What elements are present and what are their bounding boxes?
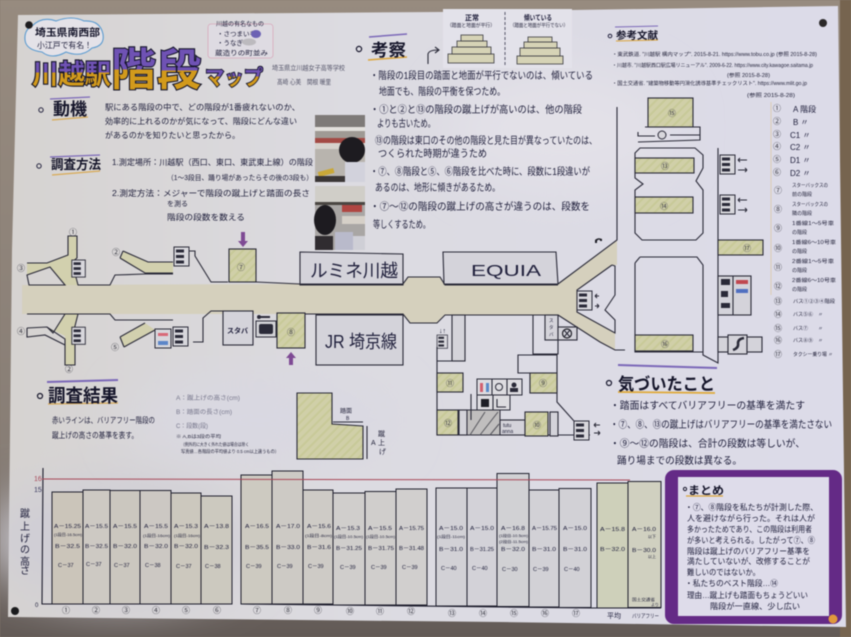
chart key: A：蹴上げの高さ(cm) — [176, 394, 240, 402]
legend of stairs: ⑦ — [774, 186, 782, 195]
bar values: C－30 — [502, 567, 518, 573]
tilt comparison diagram: 正常 — [465, 13, 479, 22]
main title: マップ — [205, 67, 263, 90]
bar values: 以上 — [648, 553, 656, 559]
bar values: C－39 — [246, 564, 262, 570]
panel: summary: ・⑦、⑧階段を私たちが計測した際、 — [685, 502, 818, 512]
bar values: B－30.0 — [632, 548, 656, 554]
bar values: B－32.5 — [55, 544, 80, 550]
stair 13 — [635, 158, 694, 173]
section: method: 2.測定方法：メジャーで階段の蹴上げと踏面の長さ — [112, 188, 310, 198]
bar values: 以下 — [648, 534, 656, 539]
section: discussion: ⑬の階段は東口のその他の階段と見た目が異なっていたのは、 — [375, 134, 597, 147]
main title: 川越駅 — [32, 60, 111, 90]
legend of stairs: 2番線1〜5号車 — [792, 258, 834, 265]
stair 16 — [635, 335, 693, 351]
legend of stairs: バス⑦ 〃 — [793, 325, 823, 332]
note: famous things in Kawagoe: 川越の有名なもの — [216, 20, 264, 28]
authors: 埼玉県立川越女子高等学校 — [272, 63, 345, 72]
y axis title: 高 — [20, 555, 30, 568]
bar values: A－15.5 — [85, 524, 108, 530]
west side stairs upper right: ② — [112, 248, 120, 257]
bar values: A－15.0 — [439, 526, 463, 532]
cloud callout: Saitama — [25, 18, 103, 56]
bar values: A－15.5 — [113, 524, 137, 530]
Lumine Kawagoe: ルミネ川越 — [310, 261, 398, 281]
bar values: (1段目-16cm) — [174, 532, 201, 538]
legend of stairs: タクシー乗り場 〃 — [793, 351, 833, 358]
x axis labels: ⑮ — [510, 609, 518, 618]
bar values: C－37 — [176, 564, 192, 570]
west side stairs upper left: ③ — [17, 264, 25, 273]
legend of stairs: C2 〃 — [790, 143, 810, 152]
bar values: C－40 — [441, 566, 457, 572]
section: noticed: ・⑨〜⑫の階段は、合計の段数は等しいが、 — [610, 437, 805, 450]
stair 9: ⑨ — [539, 379, 547, 388]
taxi stand — [718, 335, 762, 354]
stair 12 and shops: anna — [502, 429, 513, 435]
west side stairs lower: ④ — [17, 327, 25, 336]
x axis labels: ⑬ — [448, 609, 456, 618]
section: method: を測る — [167, 199, 188, 208]
bar values: C－39 — [308, 564, 324, 570]
section: references: ・東武鉄道. "川越駅 構内マップ". 2015-8-21. https://www.tobu.co.jp (参照 2015-8-28) — [612, 51, 817, 58]
y axis title: さ — [20, 565, 30, 577]
section: results heading: 調査結果 — [48, 386, 118, 406]
panel: summary: が多いと考えられる。したがって⑦、⑧ — [687, 535, 815, 545]
panel: summary: 難しいのではないか。 — [687, 567, 760, 577]
section: discussion: ・⑦〜⑫の階段の蹴上げの高さが違うのは、段数を — [370, 200, 590, 213]
note: famous things in Kawagoe: 蔵造りの町並み — [215, 48, 269, 57]
bar values: A－15.3 — [174, 524, 198, 530]
bar values: C－39 — [533, 567, 549, 573]
y axis title: の — [20, 545, 30, 556]
legend of stairs: ⑫ — [774, 282, 782, 291]
red barrier free standard line — [42, 479, 630, 480]
bar values: C－38 — [145, 563, 161, 569]
stair dimension diagram: げ — [379, 447, 386, 456]
section: discussion: あるのは、地形に傾きがあるため。 — [375, 181, 500, 194]
section: noticed: ・踏面はすべてバリアフリーの基準を満たす — [610, 399, 805, 412]
bar values: B－32.0 — [113, 544, 137, 550]
bar values: (1段目-10.5cm) — [334, 533, 364, 539]
chart key: C：段数(段) — [176, 422, 208, 430]
bar values: より — [651, 601, 659, 607]
legend of stairs: スターバックスの — [792, 182, 828, 189]
section: discussion: 考察 — [371, 41, 406, 60]
panel: summary: まとめ — [688, 484, 724, 497]
section: method: 階段の段数を数える — [167, 212, 245, 222]
stair 12 and shops: ⑫ — [444, 419, 452, 428]
section: method — [37, 155, 313, 222]
axis values: 15 — [34, 487, 42, 494]
main title: 段 — [157, 46, 201, 95]
y axis title: 蹴 — [20, 507, 30, 520]
legend of stairs: ② — [773, 117, 781, 126]
legend of stairs: バス①②③④階段 — [793, 298, 835, 305]
arrow to text — [428, 47, 439, 64]
bar values: (1段目-16cm) — [143, 532, 171, 538]
section: discussion: よりも古いため。 — [377, 117, 435, 130]
corridor — [22, 240, 617, 350]
stair 8 with purple arrow — [277, 313, 305, 365]
section: references — [608, 26, 817, 99]
legend of stairs: ⑨ — [774, 224, 782, 233]
bar values: A－16.0 — [632, 527, 656, 533]
section: results heading — [38, 380, 155, 440]
lower stair 5, toilets and stairs: ⑤ — [111, 343, 119, 352]
stair 9 — [530, 373, 557, 393]
bar values — [54, 524, 659, 607]
section: references: ・国土交通省. "建築物移動等円滑化誘導基準チェックリスト". https://www.mlit.go.jp — [612, 80, 807, 87]
legend of stairs: C1 〃 — [790, 131, 810, 140]
legend of stairs: 前の階段 — [792, 191, 812, 198]
bar values: C－37 — [58, 563, 74, 569]
main title: 階 — [111, 44, 156, 95]
JR Saikyo line: JR 埼京線 — [325, 332, 397, 352]
stair 17 — [718, 240, 763, 255]
x axis labels: ⑤ — [182, 606, 190, 615]
bar values: (1段目-16.5cm) — [54, 531, 83, 537]
section: discussion: 等しくするため。 — [373, 218, 430, 231]
legend of stairs: ⑩ — [774, 244, 782, 253]
authors: 髙崎 心美 関根 暖里 — [277, 77, 331, 86]
EQUIA — [443, 252, 558, 284]
photos of measuring stairs — [314, 115, 365, 250]
chart key: 写真値…各階段の平均値より 0.5 cm以上違うもの） — [181, 448, 279, 455]
legend of stairs: D2 〃 — [790, 169, 810, 178]
stair 11: ⑪ — [446, 379, 454, 388]
bar values: C－39 — [340, 565, 356, 571]
bar values: B－32.0 — [174, 544, 198, 550]
photo 2 — [314, 186, 365, 250]
panel: summary: 階段は蹴上げのバリアフリー基準を — [687, 546, 810, 556]
legend of stairs: の階段 — [792, 286, 807, 293]
axis values: 0 — [35, 603, 39, 609]
note: famous things in Kawagoe: ・うなぎ — [217, 38, 244, 47]
bar values: B－31.75 — [368, 546, 394, 552]
bar values: A－15.0 — [470, 526, 494, 532]
tilt comparison diagram — [428, 9, 572, 68]
legend of stairs: の階段 — [792, 248, 807, 255]
section: motive: 駅にある階段の中で、どの階段が1番疲れないのか、 — [105, 102, 300, 112]
legend of stairs: ⑧ — [774, 205, 782, 214]
stair 12 and shops — [437, 410, 525, 435]
bar values: B－32.0 — [144, 544, 168, 550]
section: discussion: つくられた時期が違うため — [378, 147, 487, 160]
legend of stairs: A 階段 — [793, 104, 816, 114]
bar chart of riser height — [20, 468, 661, 620]
stair 10 — [525, 412, 600, 440]
legend of stairs: ⑭ — [774, 310, 782, 319]
Starbucks west: スタバ — [227, 326, 248, 335]
bar values: B－35.5 — [245, 545, 269, 551]
tilt comparison diagram: （踏面と地面が平行） — [447, 22, 495, 29]
legend of stairs: の階段 — [792, 267, 807, 274]
normal stairs — [448, 35, 494, 63]
bar values: B－32.0 — [600, 547, 625, 553]
bar values: (2段目-11.5cm) — [499, 539, 528, 544]
bar values: C－39 — [277, 564, 293, 570]
legend of stairs: 1番線1〜5号車 — [792, 220, 834, 227]
section: references: (参照 2015-8-28) — [747, 92, 795, 99]
x axis labels: ② — [92, 606, 100, 615]
bar values: C－37 — [114, 563, 130, 569]
starbucks east and toilet mark — [545, 315, 577, 340]
bar values: A－15.8 — [600, 527, 625, 533]
x axis labels: ⑰ — [572, 609, 580, 618]
stair 7 with purple arrow: ⑦ — [237, 263, 245, 272]
tilted stairs — [517, 37, 563, 64]
x axis labels: ⑧ — [284, 606, 292, 615]
stair 12 and shops: tutu — [503, 423, 512, 429]
main title — [32, 44, 263, 95]
x axis labels — [62, 606, 659, 620]
x axis labels: ⑭ — [479, 609, 487, 618]
legend of stairs: 隣の階段 — [792, 210, 812, 217]
stair 14: ⑭ — [660, 202, 668, 211]
section: references: 参考文献 — [616, 29, 658, 42]
bar values: B－32.0 — [501, 547, 525, 553]
section: motive: 効率的に上れるのかが気になって、階段にどんな違い — [105, 116, 297, 126]
phone icon — [595, 238, 602, 243]
JR Saikyo line — [316, 315, 403, 365]
section: method: 調査方法 — [51, 157, 101, 172]
legend of stairs: ⑯ — [774, 336, 782, 345]
stair 16: ⑯ — [661, 340, 669, 349]
panel: summary: 理由…蹴上げも踏面もちょうどいい — [687, 590, 808, 600]
x axis labels: ③ — [122, 606, 130, 615]
section: results heading: 赤いラインは、バリアフリー階段の — [52, 415, 155, 425]
bar values: A－15.5 — [368, 526, 392, 532]
stair 17: ⑰ — [743, 244, 751, 253]
section: method: （1〜3段目、踊り場があったらその後の3段も） — [167, 173, 313, 182]
east stairs icons — [720, 155, 747, 214]
tilt comparison diagram: （踏面と地面が平行でない） — [510, 22, 568, 29]
y axis title: 上 — [20, 521, 30, 533]
legend of stairs: D1 〃 — [790, 156, 810, 165]
section: discussion: 地面でも、階段の平衡を保つため。 — [379, 85, 505, 98]
bar values: (1段目-8cm) — [305, 532, 333, 538]
bar values: A－15.75 — [532, 526, 557, 532]
bar values: (1段目-10.5cm) — [499, 533, 528, 538]
station interior outlines: ↓↑ — [439, 328, 446, 335]
section: results heading: 蹴上げの高さの基準を表す。 — [52, 430, 138, 440]
starbucks east and toilet mark: タ — [549, 324, 554, 331]
toilets and facilities east — [718, 276, 751, 315]
panel: summary — [665, 470, 842, 624]
west side stairs upper left: ① — [69, 228, 77, 237]
bar values: A－15.3 — [336, 526, 360, 532]
legend of stairs: 2番線6〜10号車 — [792, 277, 836, 284]
bar values: C－37 — [86, 562, 102, 568]
section: motive: 動機 — [53, 100, 87, 119]
west side stairs lower: ② — [65, 365, 73, 374]
lower stair 5, toilets and stairs — [111, 311, 223, 352]
legend of stairs: ⑮ — [774, 324, 782, 333]
stair 7 with purple arrow — [229, 232, 300, 284]
bar values: B－33.0 — [276, 545, 300, 551]
stair 14 — [635, 197, 693, 213]
y axis title: げ — [20, 533, 30, 545]
starbucks east and toilet mark: バ — [549, 332, 554, 337]
photo 1 — [315, 115, 365, 182]
stair dimension diagram: B — [346, 416, 350, 422]
x axis labels: ⑦ — [253, 606, 261, 615]
legend of stairs: ⑬ — [774, 297, 782, 306]
title block — [25, 18, 345, 95]
stair 13: ⑬ — [661, 162, 669, 171]
stair dimension diagram — [297, 393, 386, 459]
Starbucks west — [223, 311, 253, 345]
legend of stairs: 1番線6〜10号車 — [792, 239, 836, 246]
panel: summary: 満たしていないが、改修することが — [687, 556, 810, 566]
chart key: B：踏面の長さ(cm) — [176, 408, 232, 416]
bar values: A－15.6 — [307, 524, 331, 530]
tilt comparison diagram: 傾いている — [524, 13, 552, 22]
bus terminal buildings — [635, 148, 718, 363]
icon: key and luggage — [256, 315, 276, 337]
chart key — [176, 394, 279, 455]
legend of stairs: ① — [773, 104, 781, 113]
stair dimension diagram: A — [371, 440, 376, 447]
section: motive — [39, 97, 300, 140]
bar values: A－15.25 — [54, 524, 81, 530]
bar values: (1段目-10.5cm) — [366, 533, 396, 539]
note: famous things in Kawagoe — [208, 20, 273, 58]
bar values: A－16.5 — [245, 524, 269, 530]
axis values: 16 — [34, 476, 42, 483]
legend of stairs: B 〃 — [793, 118, 809, 127]
x axis labels: ⑪ — [376, 607, 384, 616]
bar values: B－32.5 — [85, 544, 108, 550]
bar values: C－40 — [564, 567, 580, 573]
section: noticed — [606, 365, 832, 467]
stair dimension diagram: 蹴 — [378, 429, 385, 438]
east area shapes — [558, 107, 625, 350]
stair 15 — [638, 98, 700, 142]
bar values: A－15.0 — [563, 526, 587, 532]
x axis labels: ⑥ — [213, 606, 221, 615]
axes — [42, 468, 661, 608]
legend of stairs: ⑪ — [774, 263, 782, 272]
bar values: C－40 — [472, 566, 488, 572]
bar values: B－31.25 — [336, 546, 362, 552]
bar values: B－31.0 — [563, 547, 587, 553]
bar values: A－15.75 — [399, 526, 424, 532]
station interior outlines — [437, 315, 590, 435]
bar values: A－17.0 — [276, 524, 300, 530]
facilities grid — [471, 379, 522, 420]
bar values: B－31.0 — [532, 547, 556, 553]
legend of stairs: スターバックスの — [792, 201, 828, 208]
EQUIA: EQUIA — [471, 263, 541, 280]
panel: summary: 多かったためであり、この階段は利用者 — [687, 524, 812, 534]
cloud callout: Saitama: 小江戸で有名！ — [37, 40, 92, 50]
stair dimension diagram: 踏面 — [340, 407, 352, 415]
chart key: ※ A,Bは3段の平均 — [176, 433, 222, 440]
bar values: A－13.8 — [204, 524, 229, 530]
section: noticed: 踊り場までの段数は異なる。 — [617, 454, 742, 467]
section: references: ・川越市. "川越駅西口駅広場リニューアル". 2009-6-22. https://www.city.kawagoe.saitama.jp — [612, 62, 813, 69]
stair 11 — [437, 373, 463, 392]
stair 8 with purple arrow: ⑧ — [287, 328, 295, 337]
cloud callout: Saitama: 埼玉県南西部 — [35, 26, 100, 39]
legend of stairs: ④ — [773, 142, 781, 151]
orange pin — [828, 614, 838, 624]
bar values: A－16.8 — [501, 526, 525, 532]
section: noticed: 気づいたこと — [618, 375, 715, 394]
x axis labels: ⑯ — [541, 609, 549, 618]
legend of stairs: バス⑧⑨ 〃 — [793, 337, 823, 344]
west side stairs lower — [17, 314, 173, 374]
x axis labels: ④ — [152, 606, 160, 615]
section: discussion — [356, 34, 597, 231]
bar values: B－31.48 — [399, 546, 424, 552]
section: references: (参照 2015-8-28) — [727, 72, 770, 79]
authors — [272, 63, 345, 86]
Lumine Kawagoe — [300, 252, 403, 285]
section: discussion: ・⑦、⑧階段と⑤、⑥階段を比べた時に、段数に1段違いが — [370, 165, 590, 178]
x axis labels: ⑩ — [346, 607, 354, 616]
axis values — [34, 476, 42, 609]
bar values: C－38 — [205, 564, 221, 570]
legend of stairs: バス⑤⑥ 〃 — [793, 311, 823, 318]
chart key: （例外的に大きく外れた値は場合は除く — [181, 441, 249, 448]
bars — [52, 471, 661, 608]
stair 10: ⑩ — [533, 421, 541, 430]
bar values: C－39 — [402, 565, 418, 571]
section: method: 1.測定場所：川越駅（西口、東口、東武東上線）の階段 — [112, 157, 313, 167]
stair 15: ⑮ — [668, 109, 676, 118]
station map — [17, 98, 763, 440]
bar values: B－32.3 — [204, 545, 229, 551]
bar values: B－31.6 — [307, 545, 331, 551]
note: famous things in Kawagoe: ・さつまいも — [217, 30, 256, 38]
bar values: C－39 — [371, 565, 387, 571]
panel: summary: 人を避けながら行った。それは人が — [687, 513, 815, 523]
west side stairs upper right — [112, 247, 228, 282]
legend of stairs — [771, 102, 836, 359]
bar values: B－31.0 — [439, 547, 463, 553]
x axis labels: ① — [62, 606, 70, 615]
stair dimension diagram: 上 — [378, 438, 385, 447]
section: motive: があるのかを知りたいと思ったから。 — [105, 130, 240, 140]
section: discussion: ・①と②と⑬の階段の蹴上げが高いのは、他の階段 — [370, 103, 582, 116]
panel: summary: ・私たちのベスト階段…⑭ — [685, 578, 778, 588]
x axis labels: ⑨ — [314, 606, 322, 615]
bar values: A－15.5 — [144, 524, 168, 530]
bar values: (1段目-11cm) — [437, 533, 466, 539]
bar values: B－31.25 — [470, 547, 494, 553]
x axis labels: バリアフリー — [632, 613, 659, 620]
legend of stairs: ⑥ — [773, 168, 781, 177]
legend of stairs: ③ — [773, 130, 781, 139]
legend of stairs: ⑤ — [773, 155, 781, 164]
bar values: 国土交通省 — [632, 596, 655, 602]
section: discussion: ・階段の1段目の踏面と地面が平行でないのは、傾いている — [370, 69, 593, 82]
west side stairs upper left — [17, 228, 173, 285]
x axis labels: ⑫ — [407, 607, 415, 616]
corridor bump — [300, 277, 558, 323]
legend of stairs: の階段 — [792, 229, 807, 236]
legend of stairs: ⑰ — [774, 350, 782, 359]
y axis title — [20, 507, 30, 577]
x axis labels: 平均 — [607, 611, 621, 620]
panel: summary: 階段が一直線、少し広い — [710, 601, 800, 611]
starbucks east and toilet mark: ス — [549, 318, 554, 323]
